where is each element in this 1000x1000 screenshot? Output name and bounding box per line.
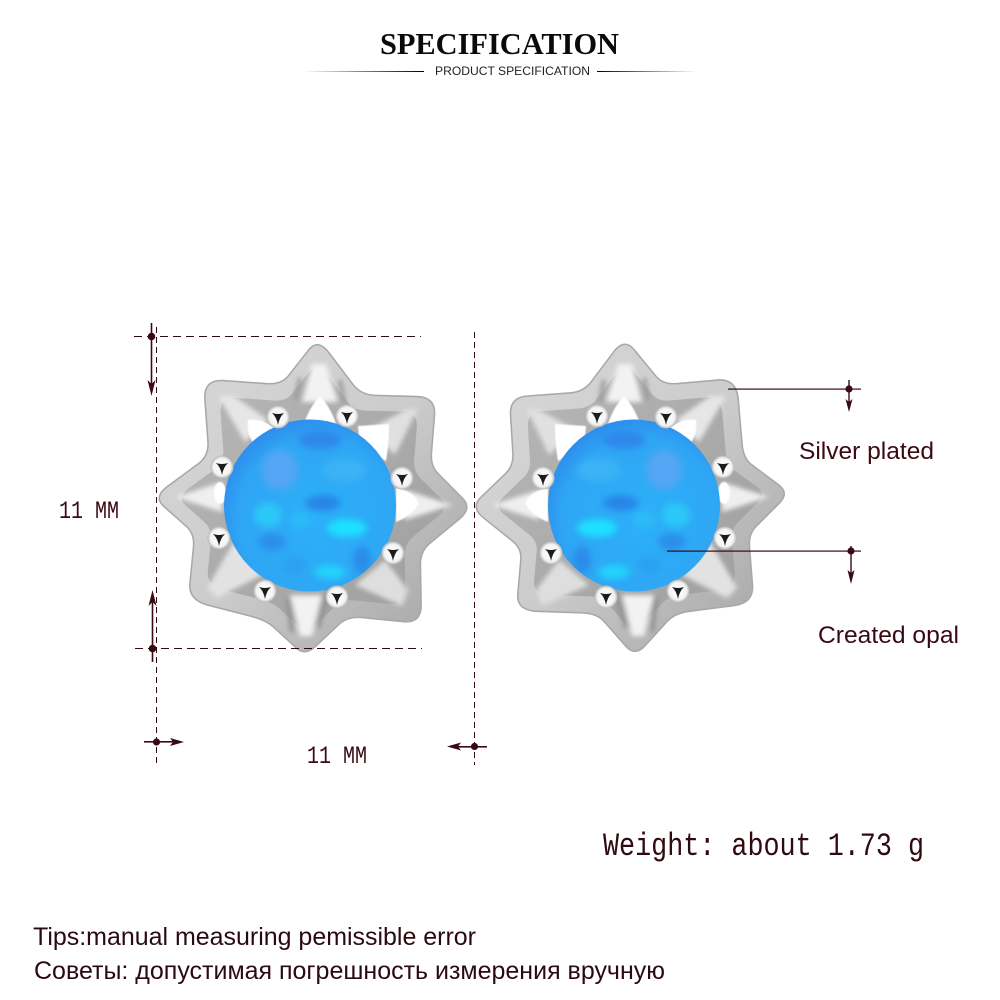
label: created opal: Created opal <box>818 622 959 649</box>
prongs left <box>208 404 414 608</box>
opal right <box>548 420 720 592</box>
arrow: width right <box>447 742 487 750</box>
header <box>303 26 697 78</box>
prongs right <box>532 404 736 608</box>
subtitle rule left <box>303 71 424 72</box>
subtitle: PRODUCT SPECIFICATION <box>435 64 590 78</box>
arrow: width left <box>144 738 184 746</box>
earring right <box>476 344 784 651</box>
opal left <box>224 420 396 592</box>
callout: silver plated <box>728 380 934 465</box>
arrow: height bottom <box>148 590 156 662</box>
metal flower right <box>476 344 784 651</box>
subtitle rule right <box>597 71 697 72</box>
label: silver plated: Silver plated <box>799 438 934 465</box>
highlights and openwork left <box>175 364 452 636</box>
earring left <box>159 345 467 652</box>
callout: created opal <box>667 546 959 649</box>
tips english: Tips:manual measuring pemissible error <box>33 923 476 951</box>
width label: 11 MM <box>307 742 367 771</box>
highlights and openwork right <box>492 364 769 636</box>
height label: 11 MM <box>59 497 119 526</box>
petal shading left <box>182 367 444 630</box>
dimension lines <box>134 327 474 765</box>
title: SPECIFICATION <box>380 26 619 61</box>
metal flower left <box>159 345 467 652</box>
arrow: height top <box>148 323 156 396</box>
petal shading right <box>499 367 762 629</box>
weight text: Weight: about 1.73 g <box>603 828 924 865</box>
tips russian: Советы: допустимая погрешность измерения вручную <box>34 957 665 985</box>
